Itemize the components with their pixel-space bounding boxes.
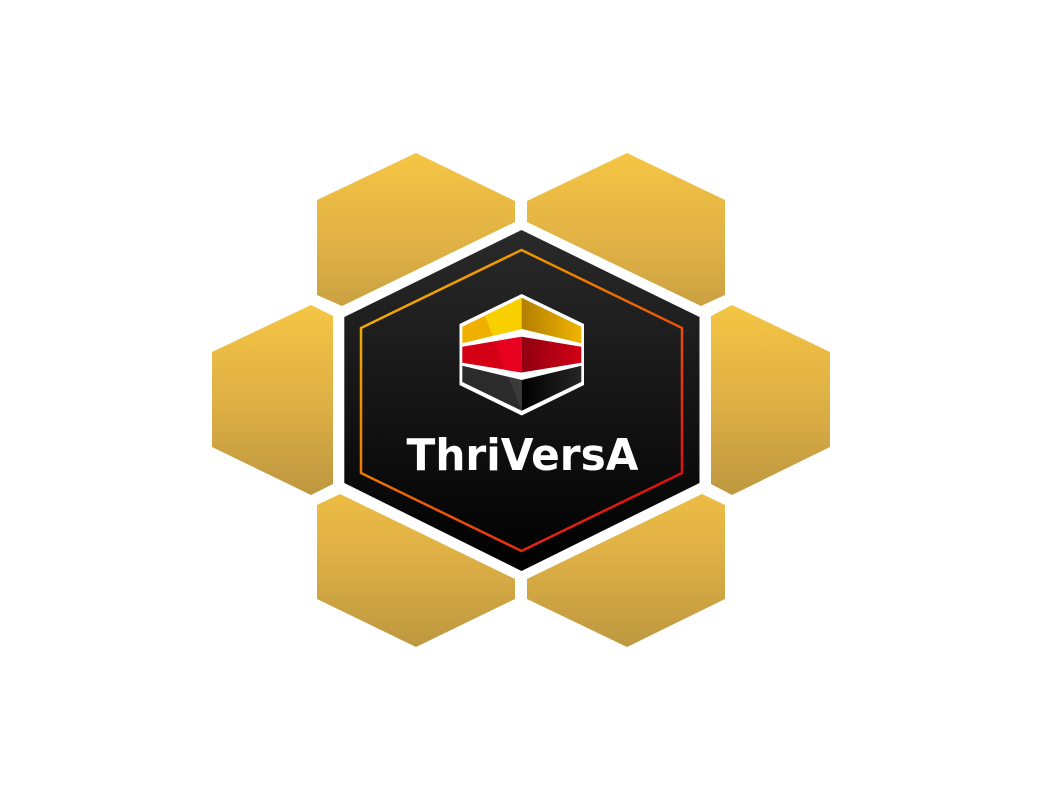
yellow layer: [462, 298, 581, 343]
icon: layered hexagon logo: [460, 294, 584, 416]
panel: central dark hexagon: [344, 230, 700, 571]
wordmark: ThriVersA: [406, 430, 638, 481]
hexagon: bottom right: [527, 494, 725, 647]
hexagon: top left: [317, 153, 515, 306]
inner gradient outline: [361, 250, 682, 551]
hexagon: top right: [527, 153, 725, 306]
red layer: [462, 337, 581, 372]
hexagon: middle right: [711, 305, 830, 495]
hexagon: bottom left: [317, 494, 515, 647]
black layer: [462, 366, 581, 411]
hexagon: middle left: [212, 305, 333, 495]
